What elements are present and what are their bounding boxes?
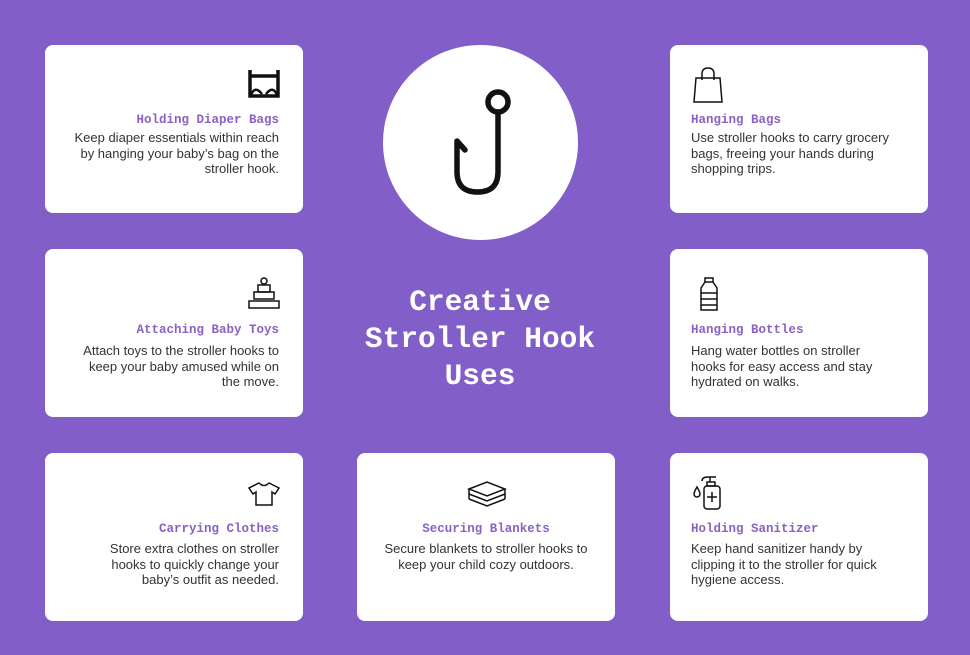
text: keep your child cozy outdoors.	[398, 556, 574, 572]
icon: hook	[457, 92, 508, 192]
text: hooks to quickly change your	[111, 556, 279, 572]
text: baby’s outfit as needed.	[142, 572, 279, 587]
heading: Holding Sanitizer	[691, 522, 819, 536]
text: Keep diaper essentials within reach	[74, 130, 279, 145]
text: hygiene access.	[691, 572, 784, 587]
heading: Holding Diaper Bags	[136, 113, 279, 127]
heading: Carrying Clothes	[159, 522, 279, 536]
heading: Hanging Bags	[691, 113, 781, 127]
card: securing blankets	[357, 453, 615, 621]
hook circle	[383, 45, 578, 240]
text: Attach toys to the stroller hooks to	[83, 343, 279, 358]
icon: stacking toy	[248, 277, 280, 309]
text	[691, 541, 877, 587]
card: hanging bags	[670, 45, 928, 213]
card: holding sanitizer	[670, 453, 928, 621]
text: hydrated on walks.	[691, 374, 799, 389]
icon: diaper	[248, 70, 280, 98]
icon: blankets	[467, 481, 507, 507]
text: by hanging your baby’s bag on the	[80, 146, 279, 160]
text	[74, 130, 279, 176]
text: Store extra clothes on stroller	[110, 541, 279, 556]
title: Stroller Hook	[365, 322, 595, 356]
card: attaching baby toys	[45, 249, 303, 417]
text	[691, 343, 872, 389]
text: clipping it to the stroller for quick	[691, 556, 877, 572]
text: shopping trips.	[691, 161, 776, 176]
text: Hang water bottles on stroller	[691, 343, 860, 358]
text: Keep hand sanitizer handy by	[691, 541, 862, 556]
title: Creative	[409, 285, 551, 319]
text	[691, 130, 889, 176]
heading: Hanging Bottles	[691, 323, 804, 337]
text	[384, 541, 588, 572]
text: bags, freeing your hands during	[691, 146, 874, 160]
text	[110, 541, 279, 587]
text: Use stroller hooks to carry grocery	[691, 130, 889, 145]
icon: bottle	[700, 277, 718, 311]
card: holding diaper bags	[45, 45, 303, 213]
title	[365, 285, 595, 393]
card: hanging bottles	[670, 249, 928, 417]
heading: Securing Blankets	[422, 522, 550, 536]
icon: sanitizer	[693, 476, 721, 510]
text: Secure blankets to stroller hooks to	[384, 541, 588, 556]
title: Uses	[445, 359, 515, 393]
text: the move.	[222, 374, 279, 389]
card: carrying clothes	[45, 453, 303, 621]
text	[83, 343, 279, 389]
text: stroller hook.	[205, 161, 279, 176]
text: hooks for easy access and stay	[691, 358, 872, 374]
icon: shirt	[248, 482, 280, 506]
heading: Attaching Baby Toys	[136, 323, 279, 337]
text: keep your baby amused while on	[89, 358, 279, 374]
icon: shopping bag	[693, 67, 723, 103]
